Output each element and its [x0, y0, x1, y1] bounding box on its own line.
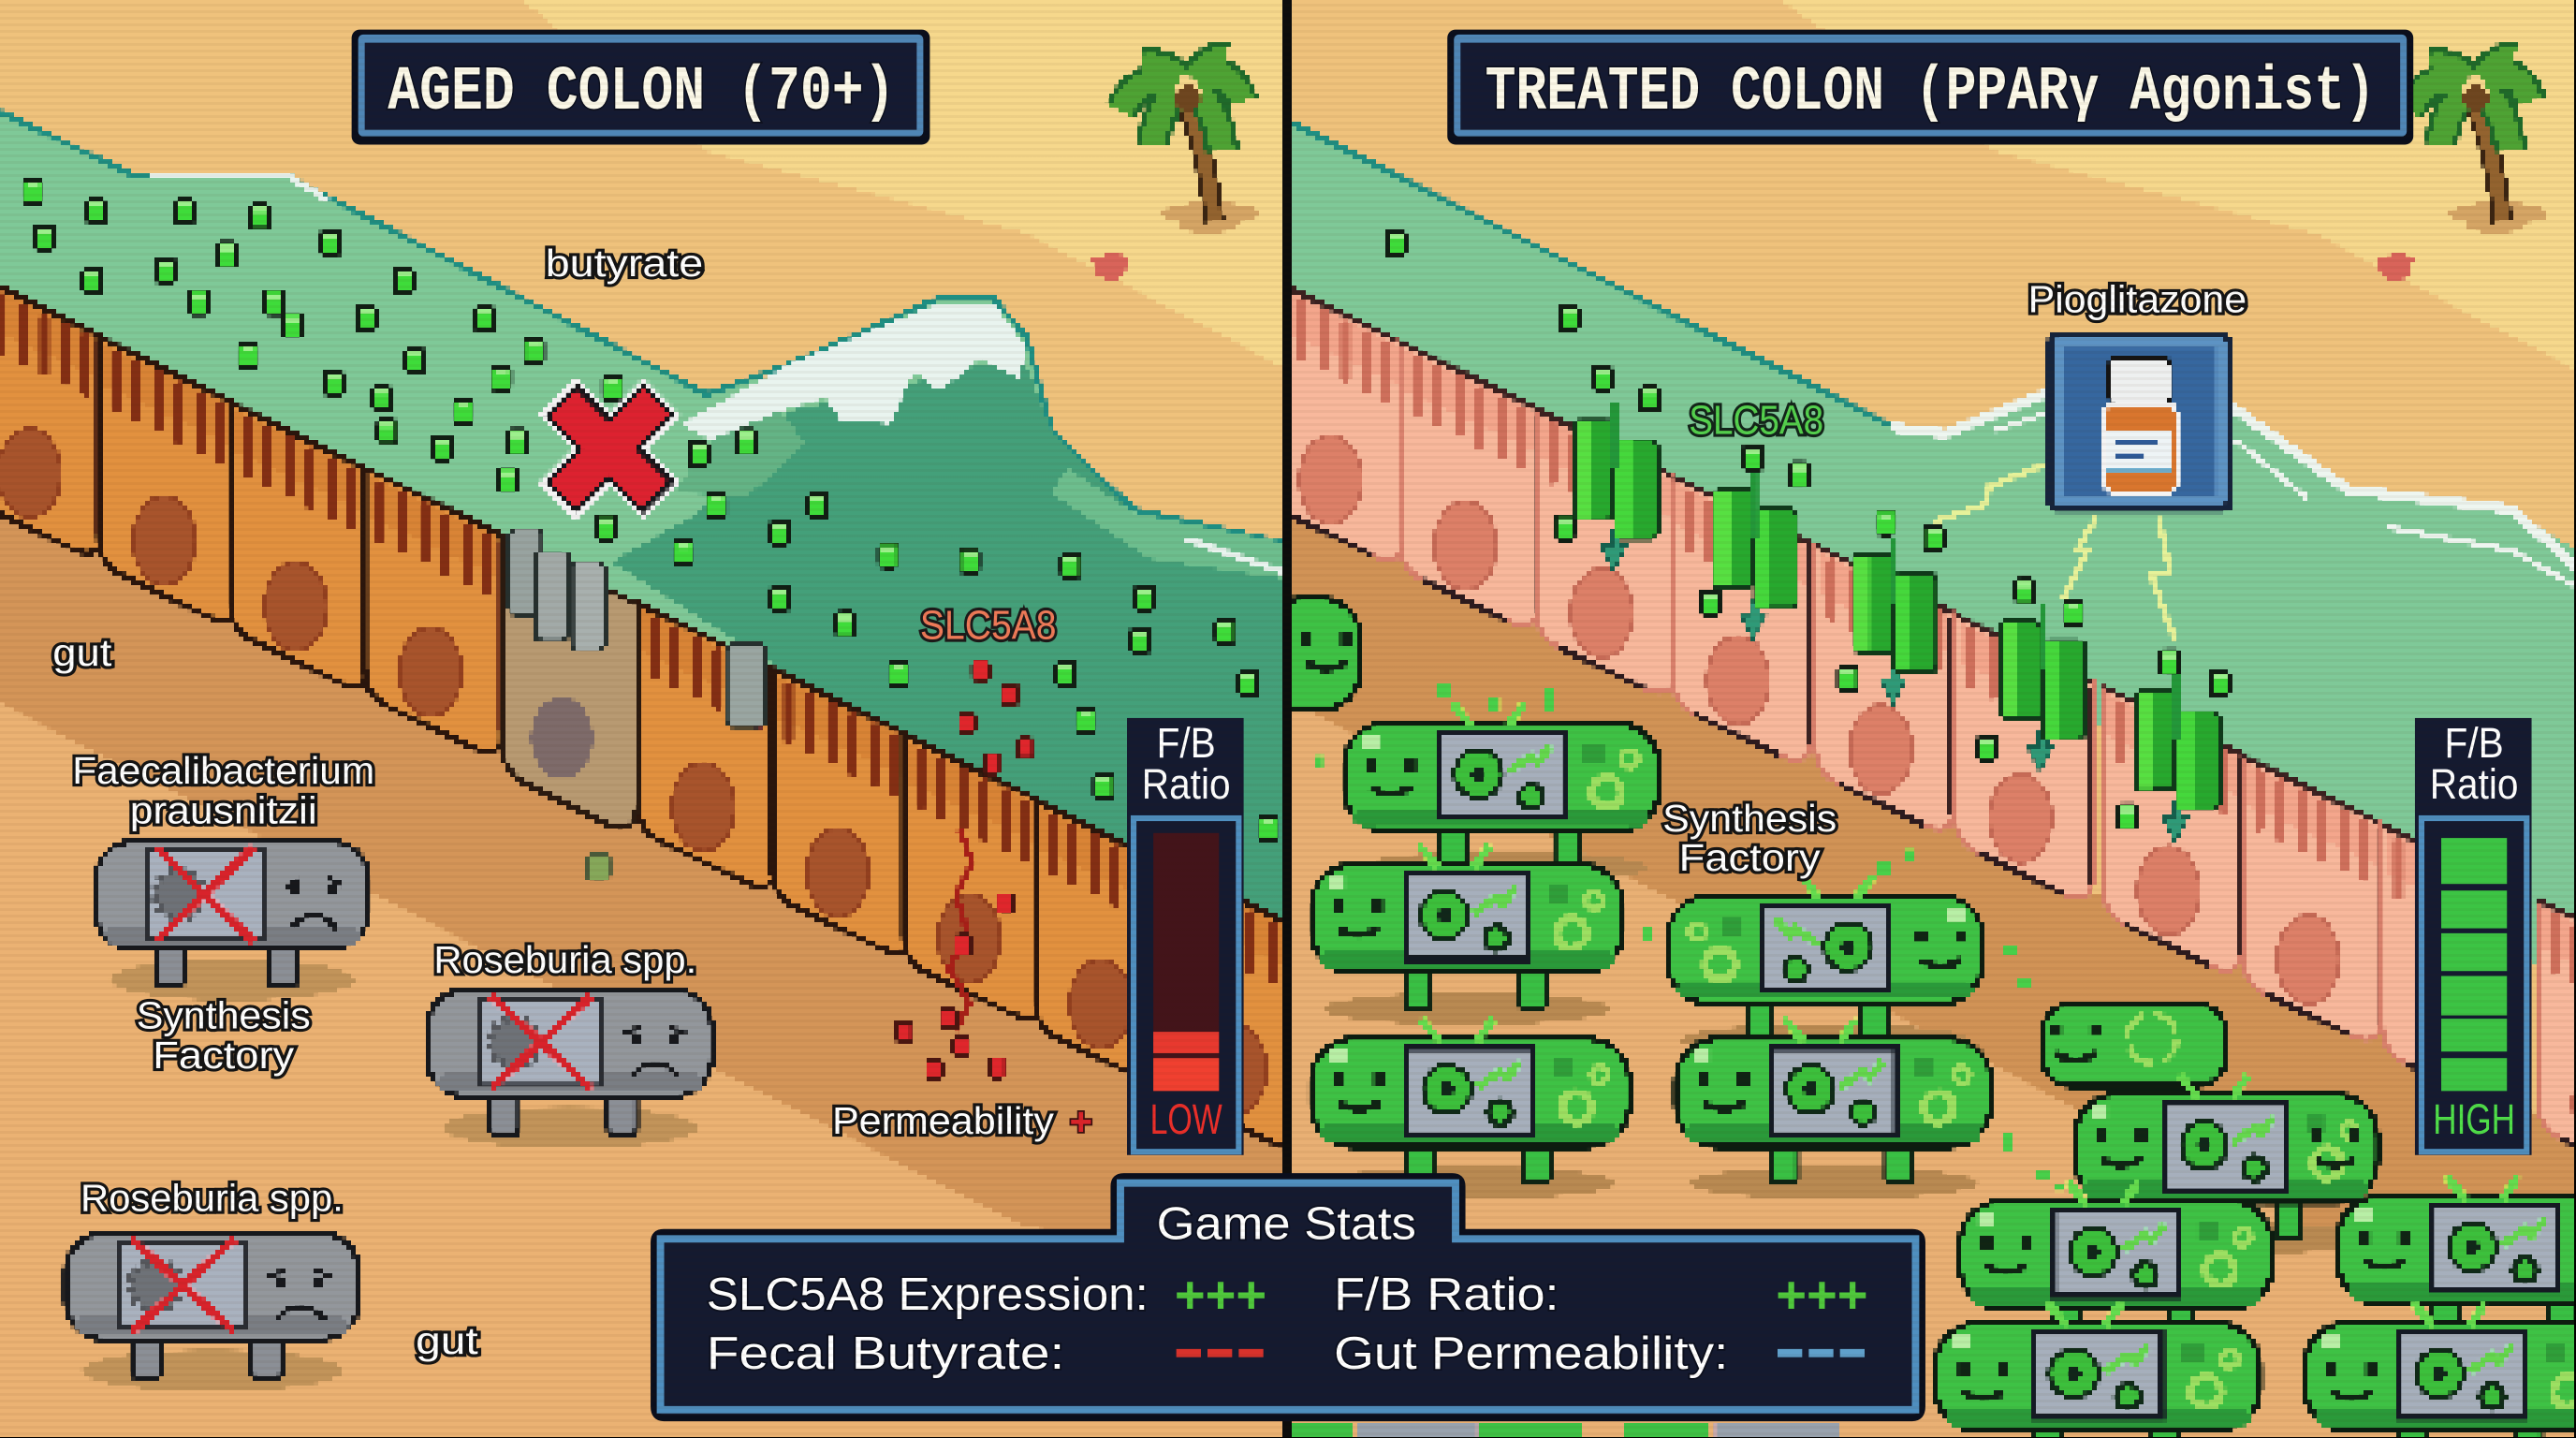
bacterium C	[1667, 875, 1983, 1056]
edge bacterium	[1265, 598, 1360, 710]
bacterium: Roseburia lower	[66, 1232, 359, 1392]
damaged grey cell	[501, 529, 766, 829]
SLC5A8 transporters	[1573, 404, 2219, 843]
stat: gut permeability: Gut Permeability:	[1334, 1328, 1728, 1379]
meter: F/B ratio low	[1127, 718, 1244, 1155]
bacterium I	[2337, 1177, 2576, 1357]
palm tree	[2408, 59, 2548, 233]
label: Faecalibacterium prausnitzii: Faecalibacterium	[72, 749, 374, 792]
water edge	[1293, 124, 1945, 433]
heading: Game Stats: Game Stats	[1157, 1198, 1416, 1249]
panel: game stats	[654, 1177, 1922, 1418]
meter: F/B ratio high	[2415, 718, 2532, 1155]
label: gut upper: gut	[52, 631, 111, 674]
wave crest	[674, 411, 805, 496]
bacterium B	[1311, 844, 1623, 1025]
bacterium: Faecalibacterium	[95, 842, 369, 1001]
label: butyrate: butyrate	[546, 242, 703, 285]
lightning bolts	[1932, 465, 2175, 640]
label: Pioglitazone: Pioglitazone	[2028, 277, 2247, 320]
butyrate molecules	[1385, 229, 2231, 830]
foam	[1891, 394, 2576, 566]
label: Permeability: +	[1070, 1100, 1092, 1144]
value: F/B plus: +++	[1776, 1265, 1868, 1324]
meter: F/B ratio low: LOW	[1150, 1095, 1222, 1143]
label: Synthesis Factory treated	[1662, 797, 1837, 879]
bacterium G	[2075, 1075, 2378, 1255]
label: Synthesis Factory treated: Synthesis	[1662, 797, 1837, 840]
label: Faecalibacterium prausnitzii	[72, 749, 374, 831]
starfish	[2376, 253, 2415, 283]
title: treated colon: TREATED COLON (PPARγ Agonist)	[1486, 57, 2376, 128]
panel: aged colon	[0, 0, 1308, 1438]
panel: treated colon	[1265, 0, 2576, 1438]
bacterium H	[1960, 1181, 2272, 1362]
wave body	[611, 353, 1281, 986]
palm tree	[1120, 59, 1260, 233]
crack	[949, 829, 973, 1032]
title: treated colon	[1447, 30, 2413, 144]
value: permeability minus	[1778, 1349, 1865, 1357]
bacterium K	[2305, 1303, 2576, 1438]
label: Roseburia centre: Roseburia spp.	[433, 938, 696, 981]
lumen water	[0, 117, 1137, 674]
stat: F/B ratio: F/B Ratio:	[1334, 1269, 1559, 1320]
gut band	[0, 493, 1281, 1282]
bacterium A	[1344, 703, 1660, 884]
small bacterium	[2042, 1004, 2226, 1086]
green sparks	[1314, 683, 2063, 1191]
label: Synthesis Factory treated: Factory	[1679, 836, 1822, 879]
meter: F/B ratio high: Ratio	[2430, 760, 2519, 808]
label: SLC5A8 aged: SLC5A8	[920, 603, 1057, 649]
water edge	[0, 111, 1281, 542]
lumen water	[1293, 124, 2576, 986]
foam line top	[148, 174, 329, 200]
title: aged colon: AGED COLON (70+)	[388, 57, 896, 128]
sand	[0, 0, 1282, 538]
sand	[1293, 0, 2576, 1438]
big red X	[557, 396, 662, 501]
label: Synthesis Factory aged: Synthesis	[137, 994, 311, 1037]
starfish	[1090, 253, 1131, 283]
bacterium: Roseburia centre	[427, 990, 712, 1149]
label: Faecalibacterium prausnitzii: prausnitzii	[130, 788, 317, 831]
leaking red molecules	[894, 659, 1035, 1081]
foam line right	[1186, 539, 1288, 574]
meter: F/B ratio high: F/B	[2445, 719, 2504, 767]
value: butyrate minus	[1177, 1349, 1264, 1357]
label: Synthesis Factory aged	[137, 994, 311, 1077]
stat: SLC5A8 expression: SLC5A8 Expression:	[707, 1269, 1149, 1320]
label: Synthesis Factory aged: Factory	[153, 1034, 295, 1077]
icon: Pioglitazone bottle	[2047, 332, 2232, 513]
meter: F/B ratio low: Ratio	[1142, 760, 1231, 808]
title: aged colon	[352, 30, 929, 144]
gut band	[1293, 493, 2576, 1282]
bacterium J	[1935, 1303, 2261, 1438]
wave foam right	[1051, 468, 1281, 579]
bacterium E	[1676, 1019, 1991, 1199]
epithelial wall	[1265, 276, 2576, 1183]
foam inner	[1995, 414, 2576, 587]
label: Roseburia lower: Roseburia spp.	[80, 1176, 344, 1219]
wave foam	[681, 304, 1027, 440]
meter: F/B ratio high: HIGH	[2433, 1095, 2515, 1143]
label: Permeability: Permeability	[832, 1099, 1055, 1142]
meter: F/B ratio low: F/B	[1157, 719, 1216, 767]
epithelial wall	[0, 270, 1308, 1150]
bacterium D	[1311, 1019, 1630, 1199]
butyrate molecules	[22, 177, 1280, 881]
label: SLC5A8 treated: SLC5A8	[1689, 397, 1823, 443]
bottom strip bacteria	[1288, 1423, 1838, 1438]
label: gut lower: gut	[416, 1319, 478, 1362]
value: SLC5A8 plus: +++	[1175, 1265, 1266, 1324]
stat: fecal butyrate: Fecal Butyrate:	[707, 1328, 1064, 1379]
